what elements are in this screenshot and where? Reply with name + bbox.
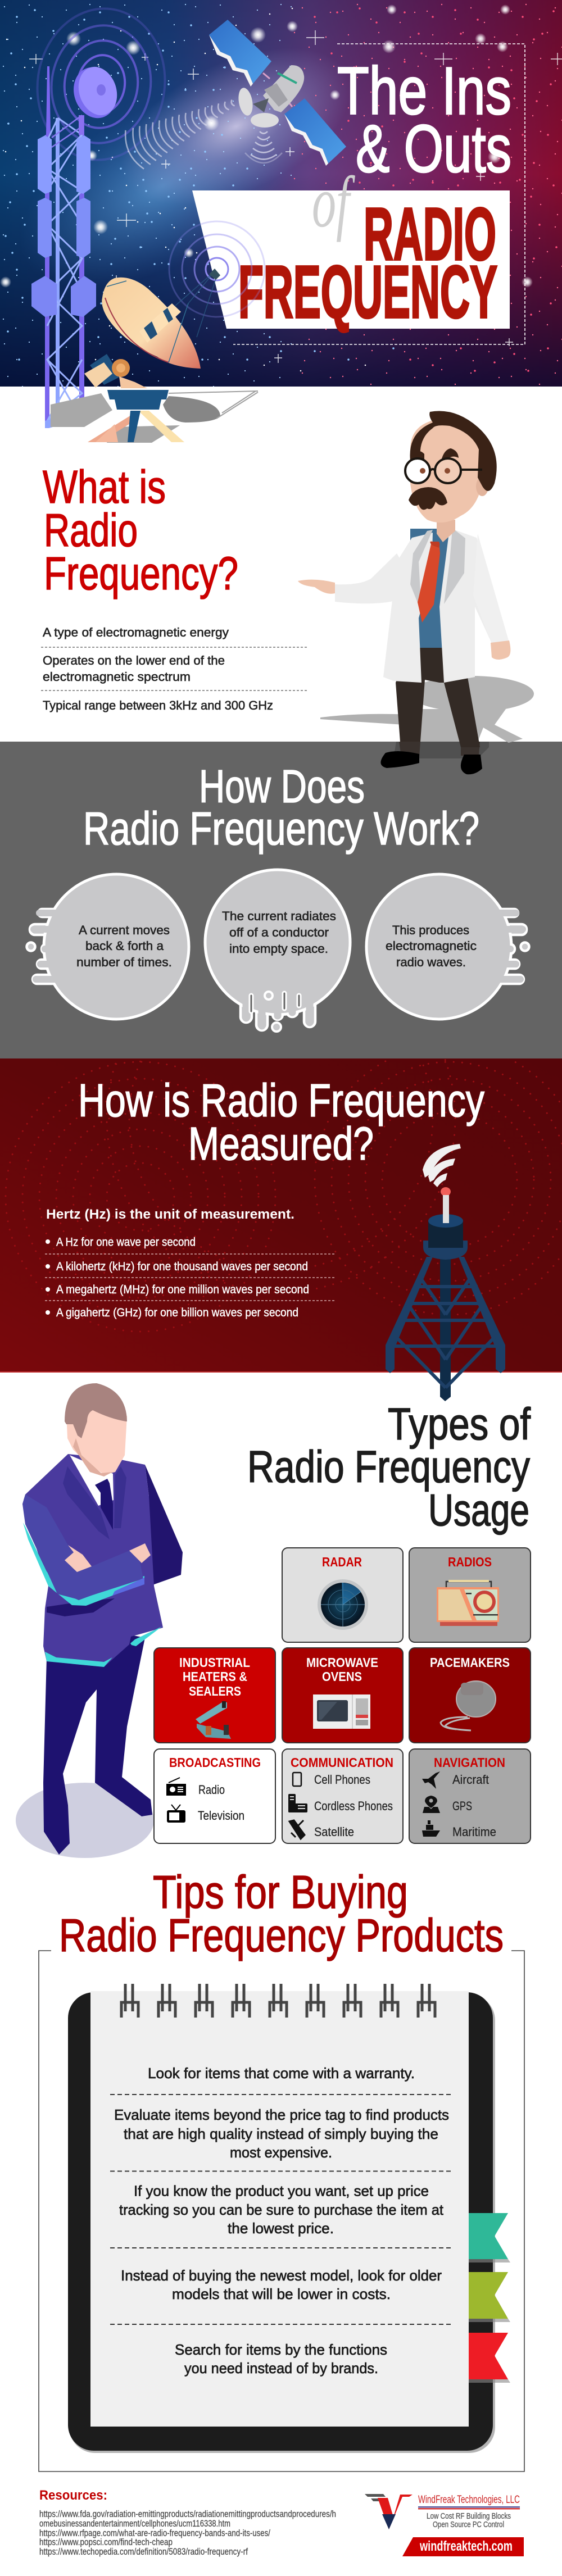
text block: buying tips: the lowest price. <box>228 2220 334 2237</box>
card: navigation: GPS <box>452 1799 472 1813</box>
header banner <box>0 0 562 387</box>
card: radios <box>409 1548 531 1642</box>
card: microwave ovens <box>282 1648 403 1743</box>
card: navigation: Maritime <box>452 1825 496 1839</box>
text block: buying tips: If you know the product you want, set up price <box>134 2182 429 2199</box>
icon: scientist illustration <box>298 411 534 774</box>
text block: definition list <box>41 625 309 712</box>
title: The Ins & Outs <box>337 53 511 187</box>
panel: notebook <box>68 1984 510 2453</box>
text block: resources: Resources: <box>39 2488 107 2503</box>
card: microwave ovens: MICROWAVE <box>306 1655 378 1670</box>
heading: How Does Radio Frequency Work <box>83 760 479 855</box>
icon: businessman illustration <box>16 1383 183 1858</box>
card: industrial heaters and sealers: HEATERS & <box>183 1669 247 1684</box>
card: radar <box>282 1548 403 1642</box>
heading: What is Radio Frequency <box>43 461 238 599</box>
text block: buying tips: models that will be lower in costs. <box>172 2286 391 2302</box>
text block: buying tips: Instead of buying the newest model, look for older <box>121 2267 442 2284</box>
text block: buying tips: most expensive. <box>230 2144 332 2161</box>
card: broadcasting: Radio <box>198 1783 225 1797</box>
panel: step 1 bubble <box>27 874 189 1019</box>
text block: buying tips: you need instead of by brands. <box>184 2360 378 2377</box>
card: navigation: NAVIGATION <box>434 1755 505 1770</box>
text block: resources: omebusinessandentertainment/cellphones/ucm116338.htm <box>39 2519 230 2529</box>
icon: satellite dish <box>84 269 220 442</box>
heading: How is Radio Frequency Measured <box>78 1074 484 1170</box>
heading: What is Radio Frequency: What is <box>43 461 166 513</box>
text block: hertz units: A gigahertz (GHz) for one billion waves per second <box>56 1306 298 1319</box>
panel: step 2 bubble <box>205 870 350 1032</box>
card: communication: Cell Phones <box>314 1773 370 1787</box>
card: communication: COMMUNICATION <box>291 1755 393 1770</box>
panel: step 3 bubble: radio waves. <box>396 955 466 969</box>
text block: resources: https://www.techopedia.com/definition/5083/radio-frequency-rf <box>39 2547 248 2557</box>
card: industrial heaters and sealers <box>154 1648 275 1743</box>
text block: definition list: Typical range between 3kHz and 300 GHz <box>43 698 273 712</box>
panel: step 3 bubble: This produces <box>392 923 469 937</box>
panel: step 1 bubble: A current moves <box>79 923 170 937</box>
text block: buying tips: that are high quality instead of simply buying the <box>124 2125 438 2142</box>
text block: buying tips: Evaluate items beyond the price tag to find products <box>114 2106 449 2123</box>
icon: dish signal rings <box>169 221 265 317</box>
logo: WindFreak Technologies: Low Cost RF Building Blocks <box>427 2511 511 2521</box>
icon: communication tower <box>31 62 123 428</box>
text block: hertz units <box>45 1207 336 1319</box>
card: industrial heaters and sealers: SEALERS <box>189 1684 241 1698</box>
logo: WindFreak Technologies <box>365 2494 520 2529</box>
logo: WindFreak Technologies: WindFreak Technologies, LLC <box>418 2494 520 2506</box>
panel: step 1 bubble: back & forth a <box>85 939 164 953</box>
card: broadcasting: BROADCASTING <box>169 1755 261 1770</box>
icon: downward signal waves <box>245 131 282 163</box>
text block: resources <box>39 2488 336 2557</box>
text block: resources: https://www.rfpage.com/what-are-radio-frequency-bands-and-its-uses/ <box>39 2528 270 2538</box>
text block: hertz units: Hertz (Hz) is the unit of measurement. <box>46 1207 294 1222</box>
panel: step 3 bubble <box>366 874 529 1019</box>
panel: step 3 bubble: electromagnetic <box>386 939 477 953</box>
heading: What is Radio Frequency: Radio <box>44 504 138 556</box>
logo: WindFreak Technologies: Open Source PC Control <box>433 2520 504 2529</box>
section background: how is it measured <box>0 1058 562 1373</box>
text block: buying tips: Look for items that come with a warranty. <box>148 2065 415 2082</box>
panel: step 2 bubble: The current radiates <box>222 909 336 923</box>
text block: definition list: Operates on the lower end of the <box>43 653 225 667</box>
title: The Ins & Outs: The Ins <box>337 53 511 129</box>
text block: resources: https://www.popsci.com/find-tech-cheap <box>39 2537 173 2547</box>
title panel: Radio Frequency <box>192 162 510 333</box>
text block: buying tips <box>110 2065 452 2377</box>
text block: definition list: electromagnetic spectrum <box>43 670 191 684</box>
heading: Tips for Buying <box>59 1866 504 1961</box>
panel: step 2 bubble: off of a conductor <box>229 925 329 939</box>
tips frame <box>39 1951 524 2471</box>
panel: step 2 bubble: into empty space. <box>229 942 328 956</box>
card: communication <box>282 1749 403 1843</box>
panel: step 1 bubble: number of times. <box>76 955 172 969</box>
website banner <box>402 2537 524 2556</box>
icon: satellite dish shadow <box>51 391 258 443</box>
heading: Types of Radio Frequency Usage: Usage <box>428 1485 529 1535</box>
heading: Tips for Buying: Tips for Buying <box>153 1866 408 1918</box>
section background: how does it work <box>0 742 562 1059</box>
text block: buying tips: tracking so you can be sure to purchase the item at <box>119 2201 444 2218</box>
card: communication: Satellite <box>314 1825 354 1839</box>
heading: What is Radio Frequency: Frequency? <box>44 547 238 599</box>
card: pacemakers <box>409 1648 531 1743</box>
heading: Types of Radio Frequency Usage: Types of <box>388 1399 531 1449</box>
card: microwave ovens: OVENS <box>322 1669 362 1684</box>
title: The Ins & Outs: & Outs <box>356 111 511 187</box>
text block: hertz units: A kilohertz (kHz) for one thousand waves per second <box>56 1260 308 1273</box>
heading: How is Radio Frequency Measured: Measured? <box>188 1117 374 1170</box>
card: navigation <box>409 1749 531 1843</box>
card: radios: RADIOS <box>448 1555 492 1569</box>
card: communication: Cordless Phones <box>314 1799 393 1813</box>
text block: hertz units: A Hz for one wave per second <box>56 1236 196 1248</box>
card: navigation: Aircraft <box>452 1773 489 1787</box>
heading: Types of Radio Frequency Usage <box>247 1399 531 1535</box>
card: pacemakers: PACEMAKERS <box>430 1655 510 1670</box>
icon: satellite <box>209 20 346 166</box>
card: radar: RADAR <box>322 1555 362 1569</box>
card: broadcasting <box>154 1749 275 1843</box>
text block: hertz units: A megahertz (MHz) for one million waves per second <box>56 1283 309 1296</box>
text block: buying tips: Search for items by the functions <box>175 2341 387 2358</box>
text block: resources: https://www.fda.gov/radiation-emittingproducts/radiationemittingproductsandprocedures/h <box>39 2509 336 2519</box>
icon: satellite signal waves <box>120 84 242 171</box>
website banner: windfreaktech.com <box>419 2538 513 2554</box>
card: industrial heaters and sealers: INDUSTRIAL <box>179 1655 250 1670</box>
title panel: Radio Frequency: of <box>312 162 356 243</box>
icon: tower signal rings <box>28 1 175 168</box>
decorative dashed frame <box>233 44 525 344</box>
card: broadcasting: Television <box>198 1809 244 1823</box>
heading: How Does Radio Frequency Work: How Does <box>199 760 365 812</box>
icon: radio mast <box>386 1144 505 1401</box>
text block: definition list: A type of electromagnetic energy <box>43 625 229 639</box>
